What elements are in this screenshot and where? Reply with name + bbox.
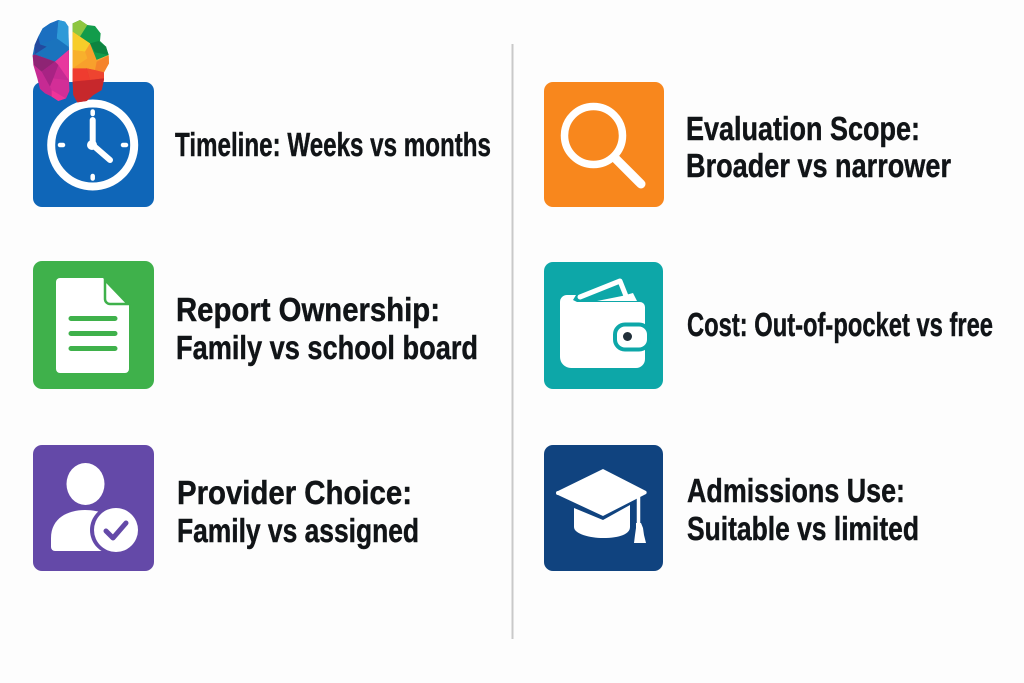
icon: person with check tile [33, 445, 154, 571]
heading: report ownership: Report Ownership: [176, 291, 440, 328]
heading: admissions use [687, 472, 919, 547]
icon: graduation cap tile [544, 445, 663, 571]
icon: magnifier tile [544, 82, 664, 207]
heading: evaluation scope: Broader vs narrower [686, 147, 951, 184]
heading: evaluation scope [686, 110, 951, 184]
heading: provider choice: Provider Choice: [177, 474, 412, 511]
heading: admissions use: Suitable vs limited [687, 510, 919, 547]
heading: provider choice: Family vs assigned [177, 512, 419, 549]
heading: admissions use: Admissions Use: [687, 472, 905, 509]
heading: provider choice [177, 474, 419, 549]
icon: brain logo [33, 20, 109, 102]
icon: wallet tile [544, 262, 663, 389]
heading: timeline: Timeline: Weeks vs months [175, 126, 491, 163]
heading: report ownership: Family vs school board [176, 329, 478, 366]
icon: document tile [33, 261, 154, 389]
icon: clock tile [33, 82, 154, 207]
heading: evaluation scope: Evaluation Scope: [686, 110, 920, 147]
heading: report ownership [176, 291, 478, 366]
